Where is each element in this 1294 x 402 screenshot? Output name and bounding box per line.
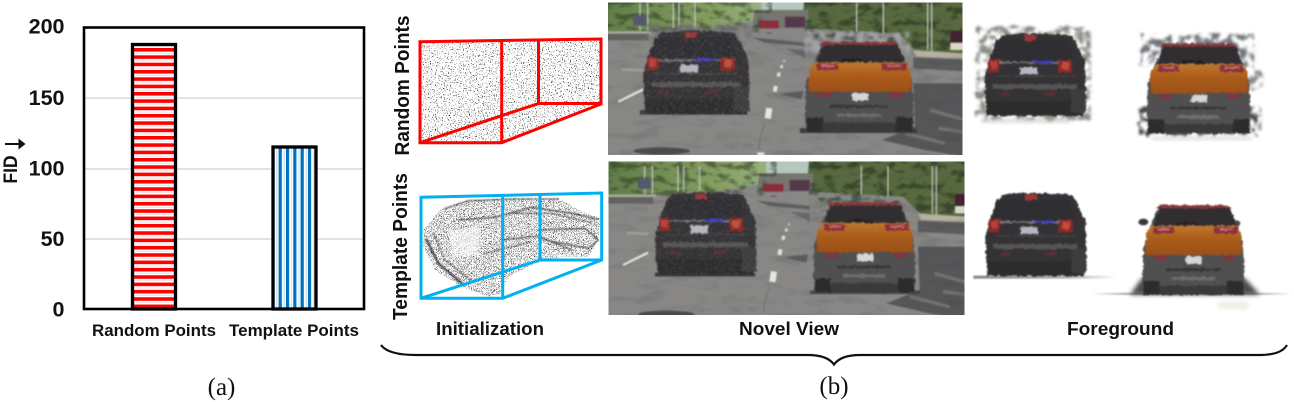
y axis tick labels: 50 — [41, 227, 65, 251]
bar: Template Points — [273, 147, 316, 309]
y axis title: FID with arrow: FID — [1, 156, 22, 184]
foreground orange SUV — [1092, 205, 1292, 309]
panel: foreground, template points — [973, 193, 1292, 309]
red wireframe box — [420, 39, 601, 143]
y axis tick labels: 150 — [29, 86, 65, 110]
panel: novel view, random points — [608, 2, 962, 155]
column label: Novel View: Novel View — [739, 319, 840, 339]
y axis tick labels: 200 — [29, 14, 65, 38]
y axis title: FID with arrow — [1, 138, 26, 184]
column label: Initialization: Initialization — [436, 319, 544, 339]
curly brace — [381, 345, 1287, 364]
y axis tick labels: 100 — [29, 156, 65, 180]
row label: Random Points: Random Points — [392, 16, 414, 156]
panel: FID bar chart (a) — [1, 14, 364, 340]
row label: Template Points: Template Points — [390, 173, 412, 320]
panel: random point initialization — [418, 37, 604, 145]
y axis tick labels — [29, 14, 65, 322]
caption (a): (a) — [208, 374, 235, 401]
y axis tick labels: 0 — [53, 298, 65, 322]
chart plot area — [84, 28, 364, 309]
panel: novel view, template points — [608, 162, 964, 315]
x label: Template Points: Template Points — [229, 321, 359, 340]
random point cloud — [422, 40, 600, 142]
bar: Random Points — [132, 44, 176, 309]
panel: template point initialization — [420, 193, 603, 298]
foreground black SUV — [973, 193, 1117, 279]
x label: Random Points: Random Points — [92, 321, 216, 340]
column label: Foreground: Foreground — [1067, 319, 1174, 339]
panel: foreground, random points — [977, 27, 1264, 139]
foreground black SUV — [977, 27, 1092, 122]
blue wireframe box — [421, 193, 602, 298]
caption (b): (b) — [819, 373, 849, 400]
template car point cloud — [420, 195, 603, 298]
foreground orange SUV — [1140, 34, 1264, 139]
artifact halos above cars — [648, 25, 912, 55]
